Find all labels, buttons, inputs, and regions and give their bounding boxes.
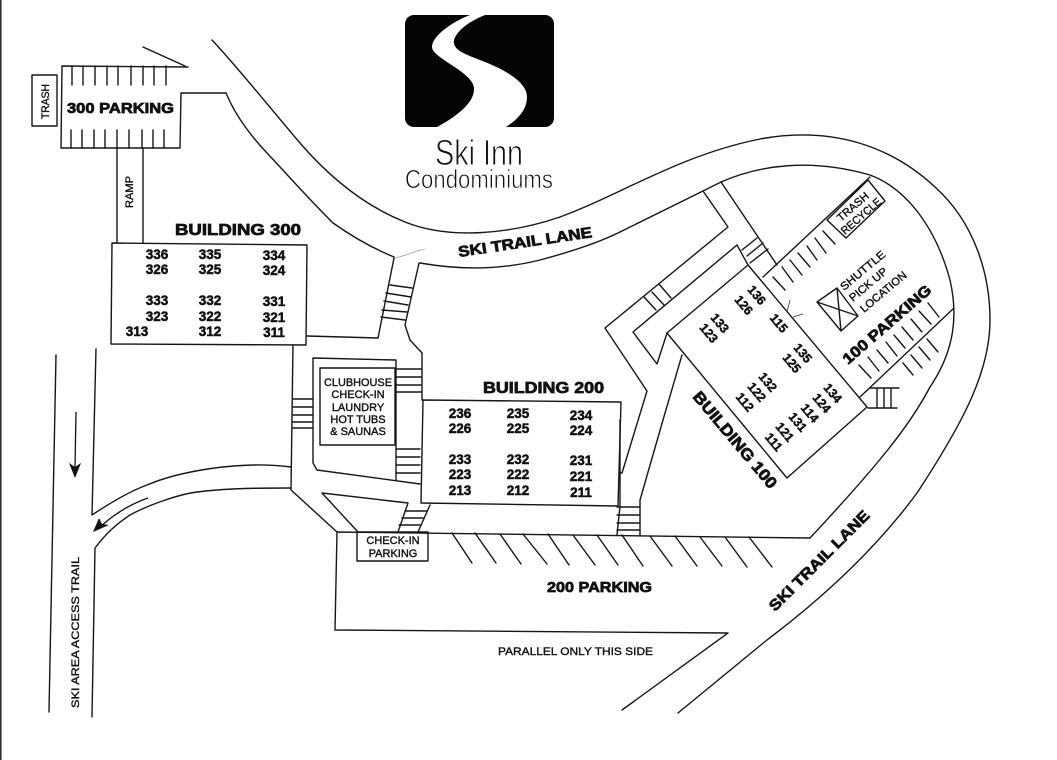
check-in drive and stairs	[322, 493, 430, 532]
unit numbers 300: 322	[199, 309, 221, 324]
building 100	[667, 245, 867, 492]
clubhouse label: HOT TUBS	[330, 414, 386, 426]
unit numbers 100: 124	[810, 391, 834, 416]
clubhouse label: CHECK-IN	[331, 389, 385, 401]
clubhouse label	[324, 377, 392, 438]
unit numbers 100: 111	[762, 430, 785, 454]
shuttle pick up location: SHUTTLE	[838, 249, 888, 293]
clubhouse label: CLUBHOUSE	[324, 377, 392, 389]
unit numbers 300: 325	[199, 262, 222, 277]
building 300	[111, 222, 307, 345]
ramp: RAMP	[124, 176, 136, 208]
label: 100 parking: 100 PARKING	[839, 282, 935, 368]
unit numbers 100: 114	[798, 401, 821, 426]
heading: building 300: BUILDING 300	[175, 222, 301, 239]
unit numbers 100: 125	[780, 351, 804, 376]
ski area access trail	[49, 349, 291, 717]
unit numbers 100: 136	[745, 283, 769, 308]
unit numbers 200: 234	[570, 408, 593, 423]
unit numbers 200: 236	[449, 406, 472, 421]
100 parking lot	[763, 177, 954, 408]
check-in parking box: PARKING	[369, 548, 417, 560]
unit numbers 300: 334	[263, 248, 286, 263]
label: ski area access trail: SKI AREA ACCESS TRAIL	[70, 557, 82, 708]
label: parallel only: PARALLEL ONLY THIS SIDE	[498, 646, 653, 658]
unit numbers 200: 224	[570, 423, 593, 438]
unit numbers 100: 135	[791, 341, 815, 366]
unit numbers 200: 233	[449, 452, 472, 467]
building 200	[421, 380, 621, 506]
label: 200 parking: 200 PARKING	[547, 579, 652, 596]
unit numbers 200: 211	[570, 485, 592, 500]
unit numbers 100: 122	[745, 380, 769, 405]
shuttle pick up location: LOCATION	[858, 269, 910, 315]
check-in parking box: CHECK-IN	[366, 535, 420, 547]
unit numbers 100	[697, 283, 845, 454]
unit numbers 300: 333	[146, 293, 169, 308]
shuttle pick up location: PICK UP	[847, 266, 890, 304]
unit numbers 300: 323	[146, 309, 169, 324]
unit numbers 200: 221	[570, 469, 593, 484]
stairs at 100 parking	[868, 388, 899, 408]
unit numbers 100: 112	[733, 390, 756, 415]
unit numbers 200	[449, 406, 593, 500]
300 parking lot	[61, 47, 226, 148]
unit numbers 200: 212	[507, 483, 529, 498]
logo wordmark	[405, 132, 553, 194]
unit numbers 300: 331	[263, 294, 286, 309]
label: Ski Trail Lane upper: SKI TRAIL LANE	[457, 224, 593, 261]
unit numbers 100: 131	[786, 410, 810, 435]
arrow: down	[69, 412, 81, 478]
clubhouse	[313, 358, 421, 484]
trash recycle box: RECYCLE	[839, 196, 884, 237]
label: 300 parking: 300 PARKING	[67, 100, 174, 117]
logo mark: ski trail S	[405, 15, 554, 127]
unit numbers 100: 133	[708, 311, 732, 336]
unit numbers 200: 223	[449, 467, 472, 482]
unit numbers 200: 222	[507, 467, 529, 482]
unit numbers 100: 134	[821, 381, 845, 406]
unit numbers 300: 313	[126, 324, 149, 339]
trash recycle box	[827, 180, 885, 238]
trash box: TRASH	[40, 84, 52, 119]
unit numbers 300: 321	[263, 310, 286, 325]
logo wordmark: Condominiums	[405, 164, 553, 194]
check-in parking box	[357, 532, 428, 561]
unit numbers 200: 232	[507, 452, 529, 467]
unit numbers 300	[126, 247, 286, 340]
unit numbers 200: 213	[449, 483, 472, 498]
unit numbers 300: 324	[263, 263, 286, 278]
road: Ski Trail Lane	[212, 40, 990, 713]
unit numbers 300: 326	[146, 262, 169, 277]
logo	[405, 15, 554, 194]
label: Ski Trail Lane lower: SKI TRAIL LANE	[766, 507, 873, 615]
arrow: left to trail	[93, 498, 148, 532]
clubhouse label: & SAUNAS	[330, 426, 386, 438]
unit numbers 300: 332	[199, 293, 221, 308]
walkways to building 100	[605, 182, 777, 535]
logo wordmark: Ski Inn	[435, 132, 523, 173]
clubhouse label: LAUNDRY	[332, 402, 385, 414]
heading: building 100: BUILDING 100	[689, 389, 780, 492]
walkway and stairs between buildings 300 and 200	[291, 258, 422, 532]
unit numbers 100: 121	[773, 420, 797, 445]
unit numbers 300: 311	[263, 325, 285, 340]
unit numbers 300: 312	[199, 324, 221, 339]
unit numbers 300: 335	[199, 247, 222, 262]
unit numbers 100: 132	[756, 370, 780, 395]
icon: crossed box	[817, 288, 858, 331]
200 parking lot	[335, 532, 810, 710]
unit numbers 100: 126	[732, 293, 756, 318]
unit numbers 300: 336	[146, 247, 169, 262]
trash recycle box: TRASH	[835, 190, 872, 224]
ramp	[117, 148, 143, 243]
unit numbers 100: 115	[767, 311, 790, 336]
unit numbers 200: 225	[507, 421, 530, 436]
unit numbers 100: 123	[697, 321, 721, 346]
trash box	[32, 75, 57, 126]
unit numbers 200: 235	[507, 406, 530, 421]
unit numbers 200: 226	[449, 421, 472, 436]
shuttle pick up location	[817, 249, 910, 331]
heading: building 200: BUILDING 200	[483, 380, 604, 397]
unit numbers 200: 231	[570, 453, 593, 468]
